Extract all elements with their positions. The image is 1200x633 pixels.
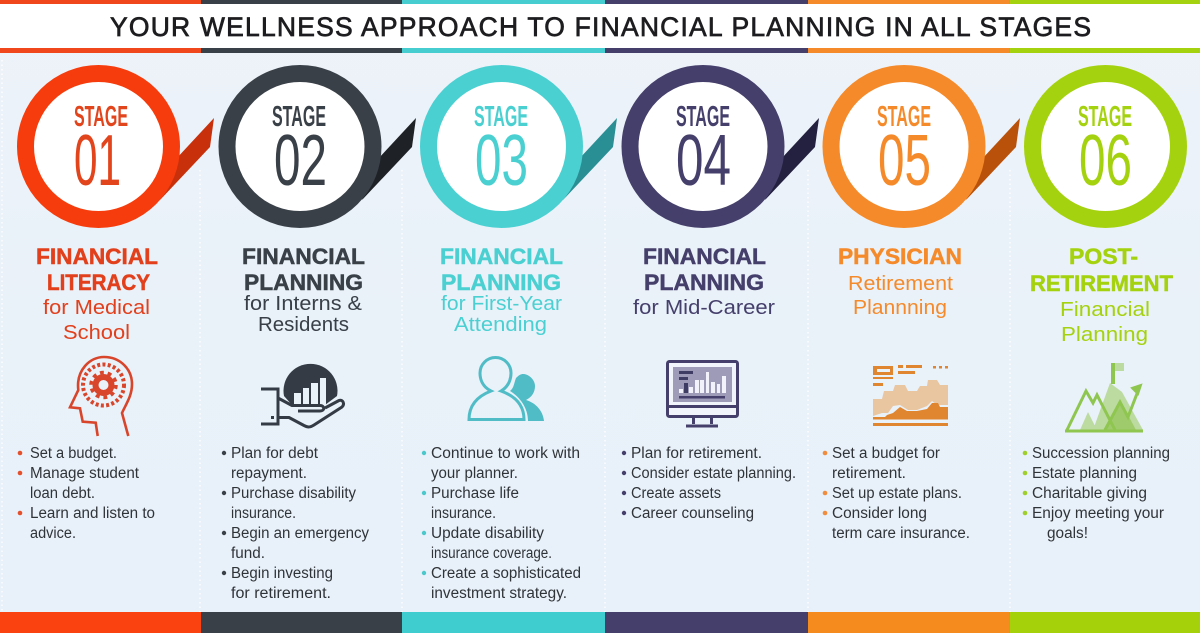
stage 6 heading: RETIREMENT [1030, 271, 1173, 296]
stage 1 bullets: Manage student [30, 465, 140, 482]
panel: stage 2 [222, 74, 416, 602]
stage 2 heading: PLANNING [244, 270, 363, 295]
stage 3 heading: FINANCIAL [440, 244, 563, 269]
stage 3 bullets: insurance coverage. [431, 545, 552, 562]
stage 2 heading: for Interns & [244, 293, 363, 315]
ribbon 2 [362, 118, 416, 200]
stage 4 badge [630, 74, 776, 220]
panel: stage 6 [1023, 74, 1178, 542]
ribbon 3 [563, 118, 617, 200]
stage 2 bullets: Begin an emergency [231, 525, 369, 542]
stage 3 heading: PLANNING [441, 270, 561, 295]
stage 2 bullets: Begin investing [231, 565, 333, 582]
stage 1 heading: LITERACY [47, 270, 150, 295]
stage 5 badge: STAGE [877, 101, 931, 133]
panel: stage 5 [823, 74, 1020, 542]
stage 5 heading: PHYSICIAN [838, 244, 962, 269]
stage 2 heading: FINANCIAL [242, 244, 365, 269]
stage 5 bullets [823, 445, 970, 542]
stage 3 heading: Attending [454, 314, 547, 336]
stage 5 badge: 05 [878, 121, 931, 201]
stage 6 badge: STAGE [1078, 101, 1132, 133]
stage 1 badge: 01 [74, 121, 121, 201]
icon: people [469, 358, 544, 421]
stage 1 badge: STAGE [74, 101, 128, 133]
stage 1 heading: School [63, 322, 130, 344]
stage 2 bullets: insurance. [231, 505, 296, 522]
stage 3 bullets [422, 445, 581, 602]
stage 4 heading: PLANNING [644, 270, 764, 295]
icon: monitor with chart [668, 362, 738, 426]
stage 4 bullets: Consider estate planning. [631, 465, 796, 482]
stage 4 badge: 04 [676, 121, 731, 201]
stage 1 bullets: Set a budget. [30, 445, 117, 462]
stage 2 bullets: fund. [231, 545, 265, 562]
panel: stage 3 [422, 74, 617, 602]
icon: area chart report [873, 365, 948, 426]
stage 3 bullets: investment strategy. [431, 585, 567, 602]
stage 6 heading: Financial [1060, 299, 1150, 321]
stage 1 heading: for Medical [43, 297, 150, 319]
stage 1 heading [36, 244, 158, 344]
stage 1 badge [26, 74, 172, 220]
stage 3 bullets: your planner. [431, 465, 518, 482]
stage 4 bullets [622, 445, 796, 522]
stage 2 bullets: Plan for debt [231, 445, 319, 462]
stage 5 badge [831, 74, 977, 220]
ribbon 5 [966, 118, 1020, 200]
ribbon 4 [765, 118, 819, 200]
stage 2 badge [227, 74, 373, 220]
stage 3 badge: 03 [475, 121, 528, 201]
stage 3 bullets: Continue to work with [431, 445, 580, 462]
stage 6 heading: Planning [1061, 324, 1148, 346]
stage 2 heading [242, 244, 365, 336]
stage 1 bullets [18, 445, 155, 542]
stage 4 heading: for Mid-Career [633, 297, 775, 319]
stage 3 bullets: insurance. [431, 505, 496, 522]
stage 4 bullets: Create assets [631, 485, 721, 502]
ribbon 1 [160, 118, 214, 200]
stage 5 heading: Plannning [853, 297, 947, 319]
stage 1 bullets: Learn and listen to [30, 505, 155, 522]
icon: mountain with flag [1065, 363, 1143, 431]
footer color bar [0, 612, 1200, 633]
stage 3 bullets: Purchase life [431, 485, 519, 502]
stage 5 heading: Retirement [848, 273, 953, 295]
stage 2 badge: STAGE [272, 101, 326, 133]
panel: stage 4 [622, 74, 819, 522]
stage 6 bullets [1023, 445, 1170, 542]
stage 3 heading: for First-Year [441, 293, 562, 315]
title: YOUR WELLNESS APPROACH TO FINANCIAL PLANNING IN ALL STAGES [110, 12, 1091, 42]
icon: head with gear [70, 357, 132, 436]
stage 6 heading: POST- [1069, 244, 1138, 269]
stage 2 heading: Residents [258, 314, 349, 336]
stage 4 heading [633, 244, 775, 319]
stage 5 bullets: Consider long [832, 505, 927, 522]
stage 3 badge: STAGE [474, 101, 528, 133]
stage 5 bullets: Set a budget for [832, 445, 940, 462]
stage 5 heading [838, 244, 962, 319]
stage 5 bullets: retirement. [832, 465, 906, 482]
stage 6 bullets: Estate planning [1032, 465, 1137, 482]
stage 5 bullets: Set up estate plans. [832, 485, 962, 502]
header band [0, 0, 1200, 53]
stage 4 bullets: Plan for retirement. [631, 445, 762, 462]
stage 2 bullets: Purchase disability [231, 485, 356, 502]
stage 4 heading: FINANCIAL [643, 244, 766, 269]
stage 6 heading [1030, 244, 1173, 346]
stage 1 bullets: loan debt. [30, 485, 95, 502]
stage 6 bullets: Enjoy meeting your [1032, 505, 1164, 522]
stage 2 bullets [222, 445, 369, 602]
stage 6 bullets: Succession planning [1032, 445, 1170, 462]
stage 2 badge: 02 [274, 121, 327, 201]
stage 5 bullets: term care insurance. [832, 525, 970, 542]
stage 3 bullets: Create a sophisticated [431, 565, 581, 582]
panel: stage 1 [18, 74, 214, 542]
stage 3 bullets: Update disability [431, 525, 544, 542]
stage 2 bullets: repayment. [231, 465, 307, 482]
stage 4 badge: STAGE [676, 101, 730, 133]
stage 1 bullets: advice. [30, 525, 76, 542]
stage 2 bullets: for retirement. [231, 585, 331, 602]
stage 1 heading: FINANCIAL [36, 244, 158, 269]
stage 3 heading [440, 244, 563, 336]
stage 3 badge [428, 74, 574, 220]
stage 6 bullets: goals! [1047, 525, 1088, 542]
stage 6 badge: 06 [1079, 121, 1132, 201]
stage 6 badge [1032, 74, 1178, 220]
icon: hand holding chart [261, 364, 343, 427]
stage 6 bullets: Charitable giving [1032, 485, 1147, 502]
stage 4 bullets: Career counseling [631, 505, 754, 522]
